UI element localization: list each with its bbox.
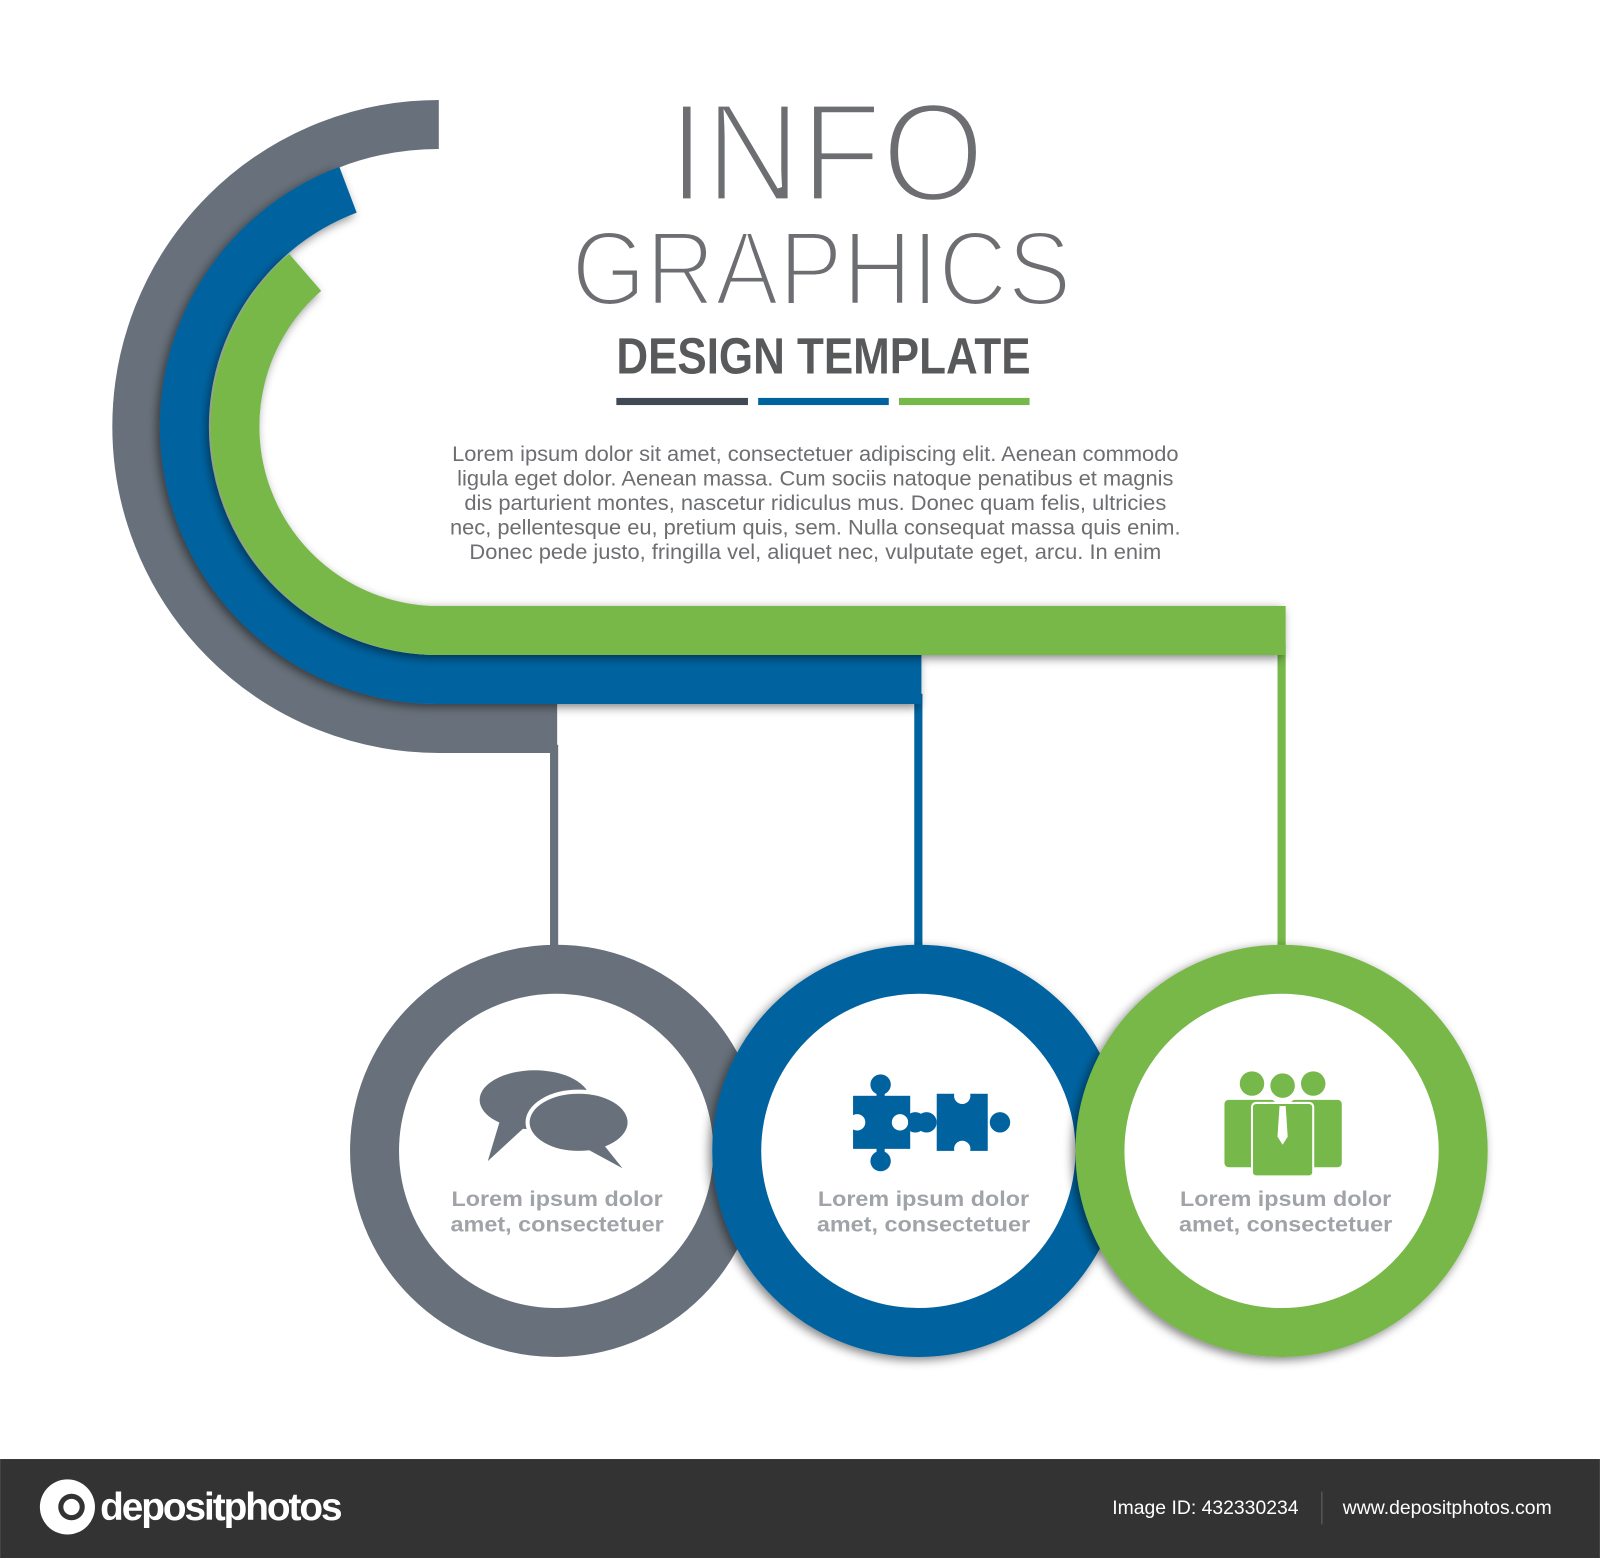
title: DESIGN TEMPLATE (616, 327, 1031, 384)
intro paragraph: ligula eget dolor. Aenean massa. Cum sociis natoque penatibus et magnis (457, 467, 1173, 491)
title: INFO (668, 74, 985, 231)
footer info: Image ID: 432330234 (1112, 1497, 1299, 1519)
intro paragraph (450, 442, 1181, 564)
icon: people (1224, 1071, 1342, 1176)
intro paragraph: Lorem ipsum dolor sit amet, consectetuer adipiscing elit. Aenean commodo (452, 442, 1179, 466)
arc band: green (235, 272, 1286, 631)
circle: gray: Lorem ipsum dolor (452, 1187, 663, 1211)
arc band: gray (137, 124, 557, 728)
intro paragraph: dis parturient montes, nascetur ridiculus mus. Donec quam felis, ultricies (464, 491, 1166, 515)
circle: blue: Lorem ipsum dolor (818, 1187, 1029, 1211)
circle: blue (737, 969, 1100, 1333)
icon: puzzle (849, 1074, 1010, 1171)
circle: blue: amet, consectetuer (817, 1213, 1030, 1237)
footer logo: depositphotos (100, 1486, 341, 1529)
footer logo (40, 1479, 341, 1535)
intro paragraph: Donec pede justo, fringilla vel, aliquet nec, vulputate eget, arcu. In enim (469, 540, 1161, 564)
circle: green: Lorem ipsum dolor (1180, 1187, 1391, 1211)
footer bar (0, 1459, 1600, 1558)
circle: gray (375, 969, 738, 1333)
title: GRAPHICS (571, 210, 1071, 328)
title underline bars (616, 398, 1030, 405)
circle: green: amet, consectetuer (1179, 1213, 1392, 1237)
circle: gray: amet, consectetuer (451, 1213, 664, 1237)
intro paragraph: nec, pellentesque eu, pretium quis, sem. Nulla consequat massa quis enim. (450, 516, 1181, 540)
arc band: blue (184, 190, 921, 680)
connector lines (550, 643, 1286, 954)
title (571, 74, 1071, 384)
icon: speech bubbles (480, 1070, 630, 1168)
circle: green (1100, 969, 1463, 1333)
footer info: www.depositphotos.com (1342, 1497, 1552, 1519)
footer info (1112, 1492, 1552, 1524)
